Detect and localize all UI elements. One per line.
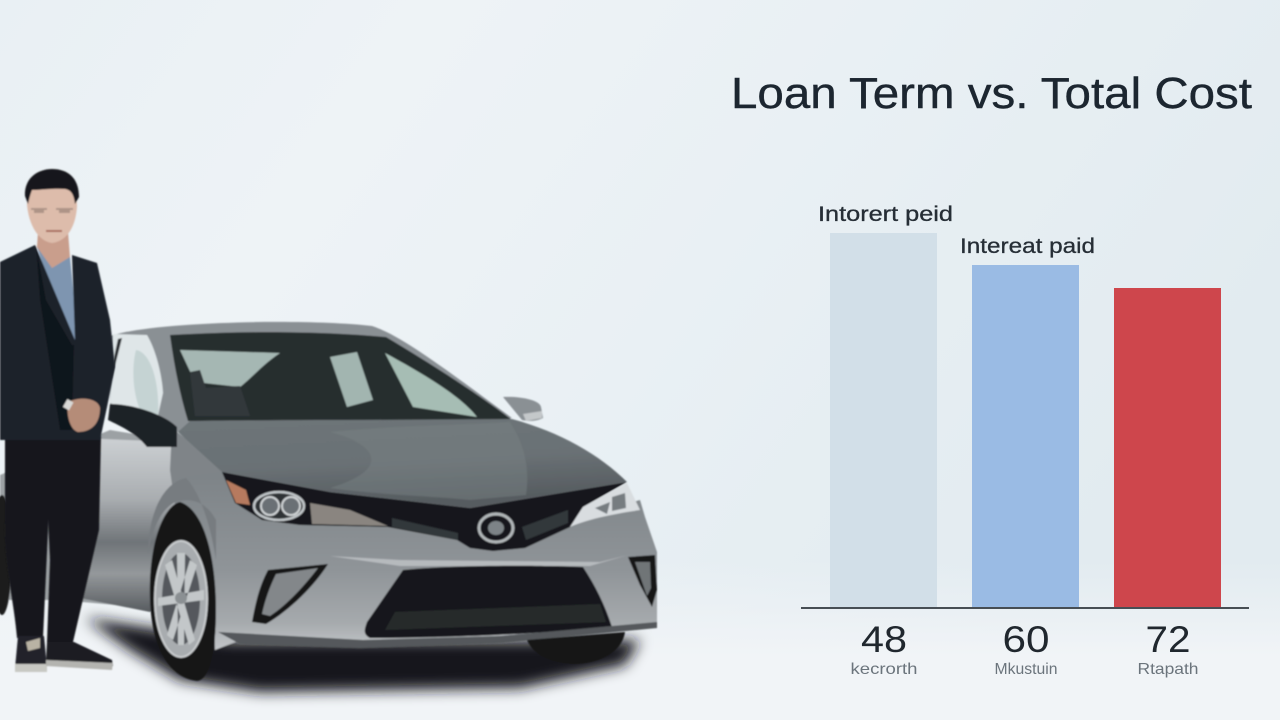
bumper crease bbox=[330, 555, 628, 566]
front bumper lip bbox=[218, 622, 657, 648]
lower air intake bbox=[365, 566, 612, 638]
door and rear quarter panel bbox=[70, 438, 215, 612]
axis value: 48: 48 bbox=[861, 619, 907, 660]
label: interest paid on first bar: Intorert peid bbox=[818, 203, 953, 226]
label: interest paid on second bar: Intereat paid bbox=[960, 235, 1095, 258]
hair bbox=[25, 169, 79, 204]
ground shadow bbox=[85, 618, 640, 692]
hands bbox=[67, 399, 100, 432]
seats bbox=[190, 370, 250, 416]
left fog lamp bbox=[252, 564, 328, 624]
side mirror near door bbox=[108, 404, 177, 447]
rear wheel edge bbox=[0, 495, 12, 615]
headlight right bbox=[570, 483, 640, 527]
suit jacket bbox=[0, 245, 115, 440]
axis unit under 60: Mkustuin bbox=[994, 661, 1058, 678]
bar: 48 months bbox=[830, 233, 937, 608]
glasses bbox=[31, 208, 73, 213]
right fog lamp bbox=[628, 555, 657, 607]
upper grille band bbox=[222, 472, 627, 551]
axis unit under 48: kecrorth bbox=[850, 661, 918, 678]
mouth bbox=[46, 230, 62, 232]
right trouser leg bbox=[44, 436, 101, 642]
front fender and bumper bbox=[177, 472, 657, 650]
illustration: man in dark suit bbox=[0, 169, 115, 672]
illustration: grey sedan bbox=[0, 322, 657, 692]
roof bbox=[110, 322, 512, 432]
rear body behind the person bbox=[0, 430, 170, 610]
title: Loan Term vs. Total Cost bbox=[731, 69, 1252, 118]
side window bbox=[110, 334, 163, 420]
bar: 72 months bbox=[1114, 288, 1221, 608]
fender top behind the hood edge bbox=[170, 428, 240, 540]
shoe: left bbox=[15, 636, 47, 668]
watch bbox=[63, 399, 73, 410]
axis value: 60: 60 bbox=[1002, 619, 1050, 660]
chart axis bbox=[801, 607, 1249, 609]
grille mesh bbox=[392, 510, 568, 540]
axis unit under 72: Rtapath bbox=[1138, 661, 1198, 678]
left trouser leg bbox=[5, 436, 50, 638]
wing mirror bbox=[503, 397, 543, 421]
headlight left bbox=[226, 480, 250, 505]
neck bbox=[37, 232, 70, 268]
wheel arch and fender flare bbox=[148, 478, 216, 560]
shoe: right bbox=[46, 642, 113, 666]
windshield bbox=[170, 332, 512, 421]
badge bbox=[479, 514, 513, 542]
bar: 60 months bbox=[972, 265, 1079, 608]
hood bbox=[178, 419, 627, 508]
left front wheel bbox=[150, 502, 216, 681]
face bbox=[27, 182, 77, 243]
shirt bbox=[37, 247, 78, 345]
right front wheel bbox=[527, 632, 625, 664]
axis value: 72: 72 bbox=[1146, 619, 1190, 660]
bar chart: loan term vs total cost bbox=[801, 203, 1249, 678]
windshield glass highlights bbox=[180, 350, 280, 387]
